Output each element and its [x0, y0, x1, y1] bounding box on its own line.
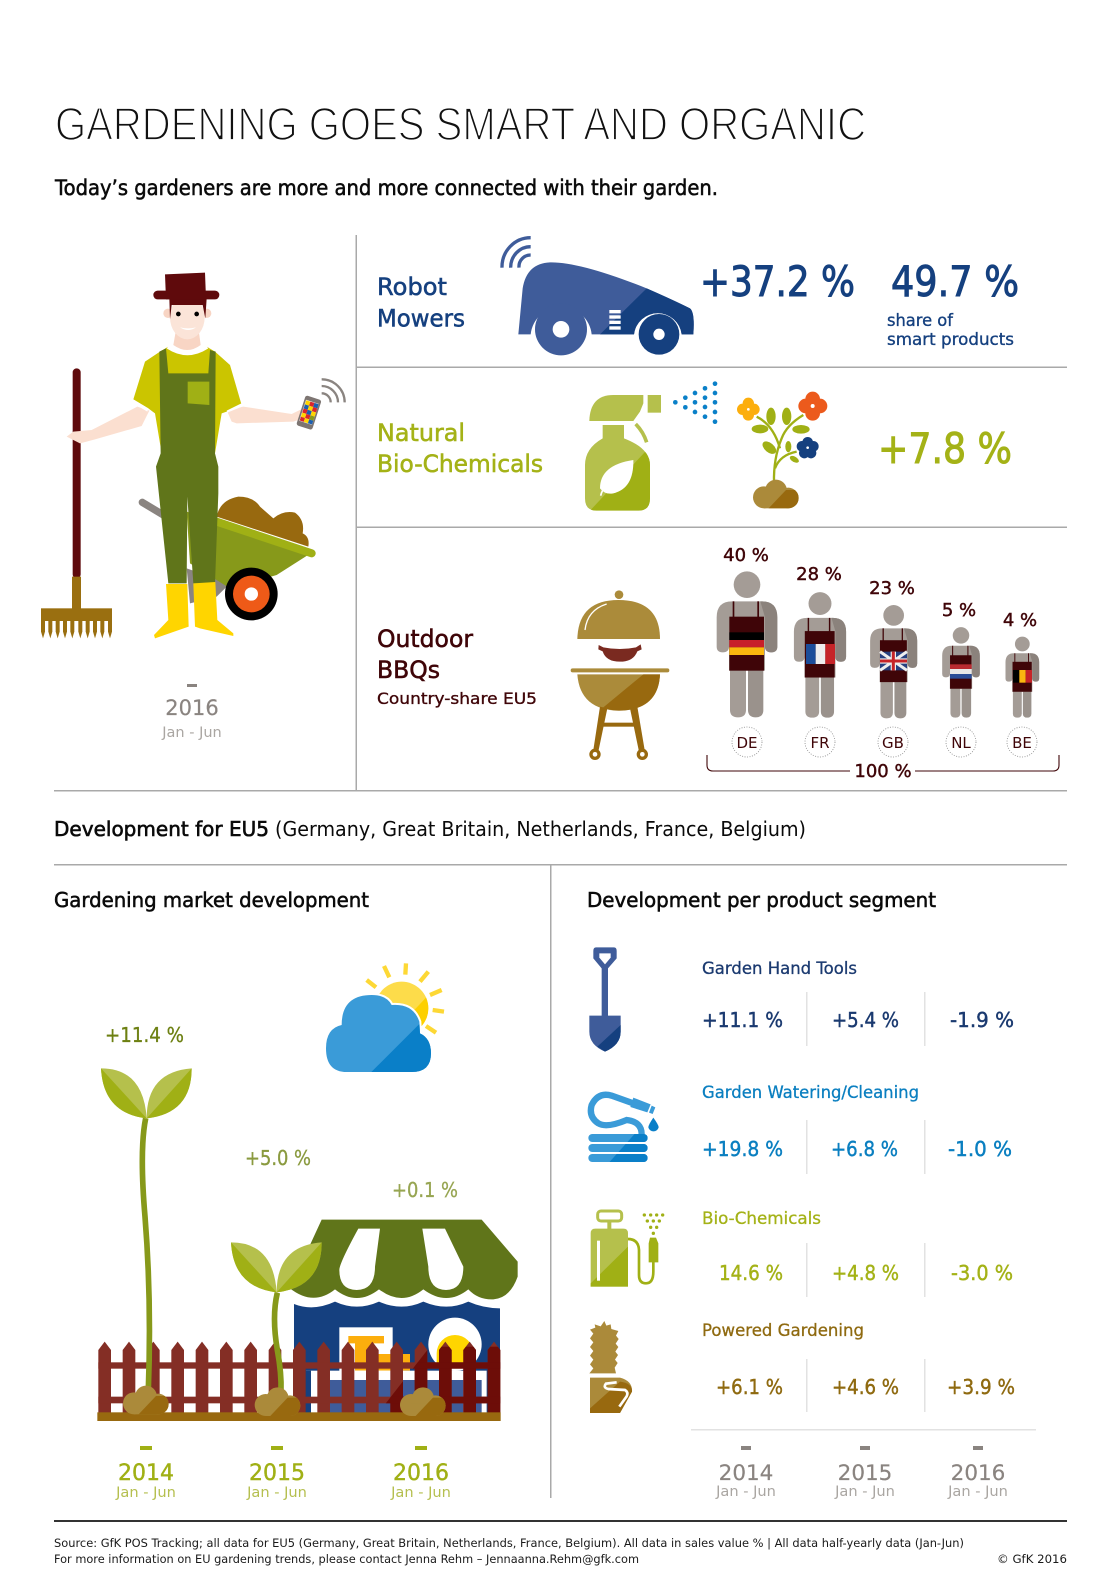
axis labels: market years	[115, 1446, 451, 1501]
value labels: market growth	[105, 1023, 458, 1202]
bracket: 100%	[707, 755, 1059, 782]
row: bio-chemicals: -3.0 %	[951, 1261, 1013, 1285]
axis labels: segment years: Jan - Jun	[947, 1483, 1008, 1500]
country badges: NL	[951, 734, 971, 752]
plant 2015	[231, 1242, 322, 1417]
icon: shop	[290, 1220, 518, 1413]
icon: rake	[41, 368, 112, 638]
axis labels: market years: Jan - Jun	[390, 1484, 451, 1501]
percent labels	[723, 545, 1037, 631]
axis labels: segment years: 2016	[951, 1461, 1005, 1486]
note: share of smart products: smart products	[887, 330, 1014, 350]
year column separators	[691, 992, 1036, 1430]
panel heading: gardening market development: Gardening market development	[54, 888, 369, 912]
title: GARDENING GOES SMART AND ORGANIC	[55, 98, 866, 150]
icon: chainsaw	[589, 1321, 632, 1413]
panel: natural bio-chemicals	[377, 381, 1012, 514]
bracket: 100%: 100 %	[854, 761, 912, 782]
row: garden watering/cleaning: -1.0 %	[948, 1137, 1012, 1161]
row: garden watering/cleaning: +6.8 %	[831, 1137, 898, 1161]
section heading: development for EU5: Development for EU5	[54, 817, 269, 841]
row: bio-chemicals	[702, 1209, 1013, 1285]
row: bio-chemicals: Bio-Chemicals	[702, 1209, 821, 1229]
footer: For more information on EU gardening trends, please contact Jenna Rehm – Jennaanna.Rehm@gfk.com	[54, 1552, 639, 1566]
axis labels: segment years: 2015	[838, 1461, 892, 1486]
row: powered gardening: +6.1 %	[716, 1375, 783, 1399]
row: garden hand tools	[702, 959, 1014, 1032]
value labels: market growth: +11.4 %	[105, 1023, 184, 1047]
footer	[54, 1520, 1067, 1566]
axis labels: market years: 2016	[393, 1461, 449, 1486]
subtitle: Today’s gardeners are more and more connected with their garden.	[54, 176, 718, 200]
axis labels: segment years: Jan - Jun	[715, 1483, 776, 1500]
row: powered gardening: +4.6 %	[832, 1375, 899, 1399]
axis labels: market years: Jan - Jun	[115, 1484, 176, 1501]
heading: BBQs	[377, 656, 440, 684]
icon: pressure sprayer	[591, 1211, 664, 1287]
label: 2016 Jan-Jun: 2016	[165, 696, 219, 720]
label: 2016 Jan-Jun: Jan - Jun	[161, 725, 222, 741]
value: 49.7 %: 49.7 %	[891, 257, 1019, 306]
percent labels: 4 %	[1003, 610, 1037, 631]
panel: product segment table	[588, 947, 1036, 1500]
heading: Robot	[377, 273, 447, 301]
heading	[377, 419, 543, 478]
heading: Outdoor	[377, 625, 473, 653]
row: garden hand tools: +5.4 %	[832, 1008, 899, 1032]
note: share of smart products: share of	[887, 311, 954, 331]
value labels: market growth: +0.1 %	[392, 1178, 458, 1202]
country badges: DE	[736, 734, 758, 752]
heading: Natural	[377, 419, 465, 447]
row: bio-chemicals: 14.6 %	[719, 1261, 783, 1285]
fence and ground	[97, 1342, 501, 1421]
axis labels: segment years	[715, 1446, 1008, 1500]
percent labels: 5 %	[942, 600, 976, 621]
row: powered gardening: +3.9 %	[947, 1375, 1015, 1399]
note: share of smart products	[887, 311, 1014, 350]
axis labels: market years: 2015	[249, 1461, 305, 1486]
layout rules	[54, 235, 1067, 1498]
percent labels: 23 %	[869, 578, 915, 599]
icon: barbecue grill	[571, 590, 669, 760]
chart: market development illustration	[97, 1068, 518, 1421]
panel: outdoor BBQs	[377, 545, 1059, 782]
row: garden watering/cleaning: +19.8 %	[702, 1137, 783, 1161]
heading	[377, 625, 537, 708]
row: garden watering/cleaning	[702, 1083, 1012, 1161]
country badges	[732, 727, 1037, 757]
country badges: FR	[810, 734, 830, 752]
icon: wheelbarrow	[142, 497, 313, 620]
row: bio-chemicals: +4.8 %	[832, 1261, 899, 1285]
axis labels: market years: Jan - Jun	[246, 1484, 307, 1501]
value labels: market growth: +5.0 %	[245, 1146, 311, 1170]
row: garden hand tools: -1.9 %	[950, 1008, 1014, 1032]
plant 2014	[101, 1068, 192, 1415]
percent labels: 40 %	[723, 545, 769, 566]
icon: hose	[588, 1095, 659, 1163]
label: 2016 Jan-Jun	[161, 684, 222, 741]
heading: Bio-Chemicals	[377, 450, 543, 478]
icon: spray bottle and flowers	[585, 381, 827, 514]
axis labels: segment years: 2014	[719, 1461, 773, 1486]
row: garden hand tools: +11.1 %	[702, 1008, 783, 1032]
icon: robot mower	[502, 238, 694, 355]
panel: robot mowers	[377, 238, 1019, 355]
percent labels: 28 %	[796, 564, 842, 585]
heading: Country-share EU5	[377, 689, 537, 708]
figures with flag aprons	[717, 571, 1039, 718]
footer: Source: GfK POS Tracking; all data for EU5 (Germany, Great Britain, Netherlands, France, Belgium). All data in sales value % | All data half-yearly data (Jan-Jun)	[54, 1536, 964, 1550]
icon: sun and cloud	[326, 963, 444, 1073]
row: powered gardening	[702, 1321, 1015, 1399]
value: +7.8 %: +7.8 %	[878, 424, 1012, 473]
farmer figure	[67, 273, 308, 638]
row: garden watering/cleaning: Garden Watering/Cleaning	[702, 1083, 919, 1103]
heading	[377, 273, 465, 332]
footer: © GfK 2016	[997, 1552, 1067, 1566]
chart: country share figures	[707, 545, 1059, 782]
row: garden hand tools: Garden Hand Tools	[702, 959, 857, 979]
section heading: development for EU5: (Germany, Great Britain, Netherlands, France, Belgium)	[275, 817, 806, 841]
axis labels: market years: 2014	[118, 1461, 174, 1486]
section heading: development for EU5	[54, 817, 806, 841]
axis labels: segment years: Jan - Jun	[834, 1483, 895, 1500]
icon: smartphone with signal	[296, 379, 345, 430]
mound 2016	[400, 1387, 450, 1417]
panel heading: development per product segment: Development per product segment	[587, 888, 936, 912]
icon: shovel	[589, 947, 621, 1052]
row: powered gardening: Powered Gardening	[702, 1321, 864, 1341]
heading: Mowers	[377, 304, 465, 332]
country badges: BE	[1012, 734, 1032, 752]
value: +37.2 %: +37.2 %	[700, 257, 855, 306]
country badges: GB	[882, 734, 904, 752]
illustration: gardener with rake, smartphone and wheelbarrow	[41, 273, 345, 638]
